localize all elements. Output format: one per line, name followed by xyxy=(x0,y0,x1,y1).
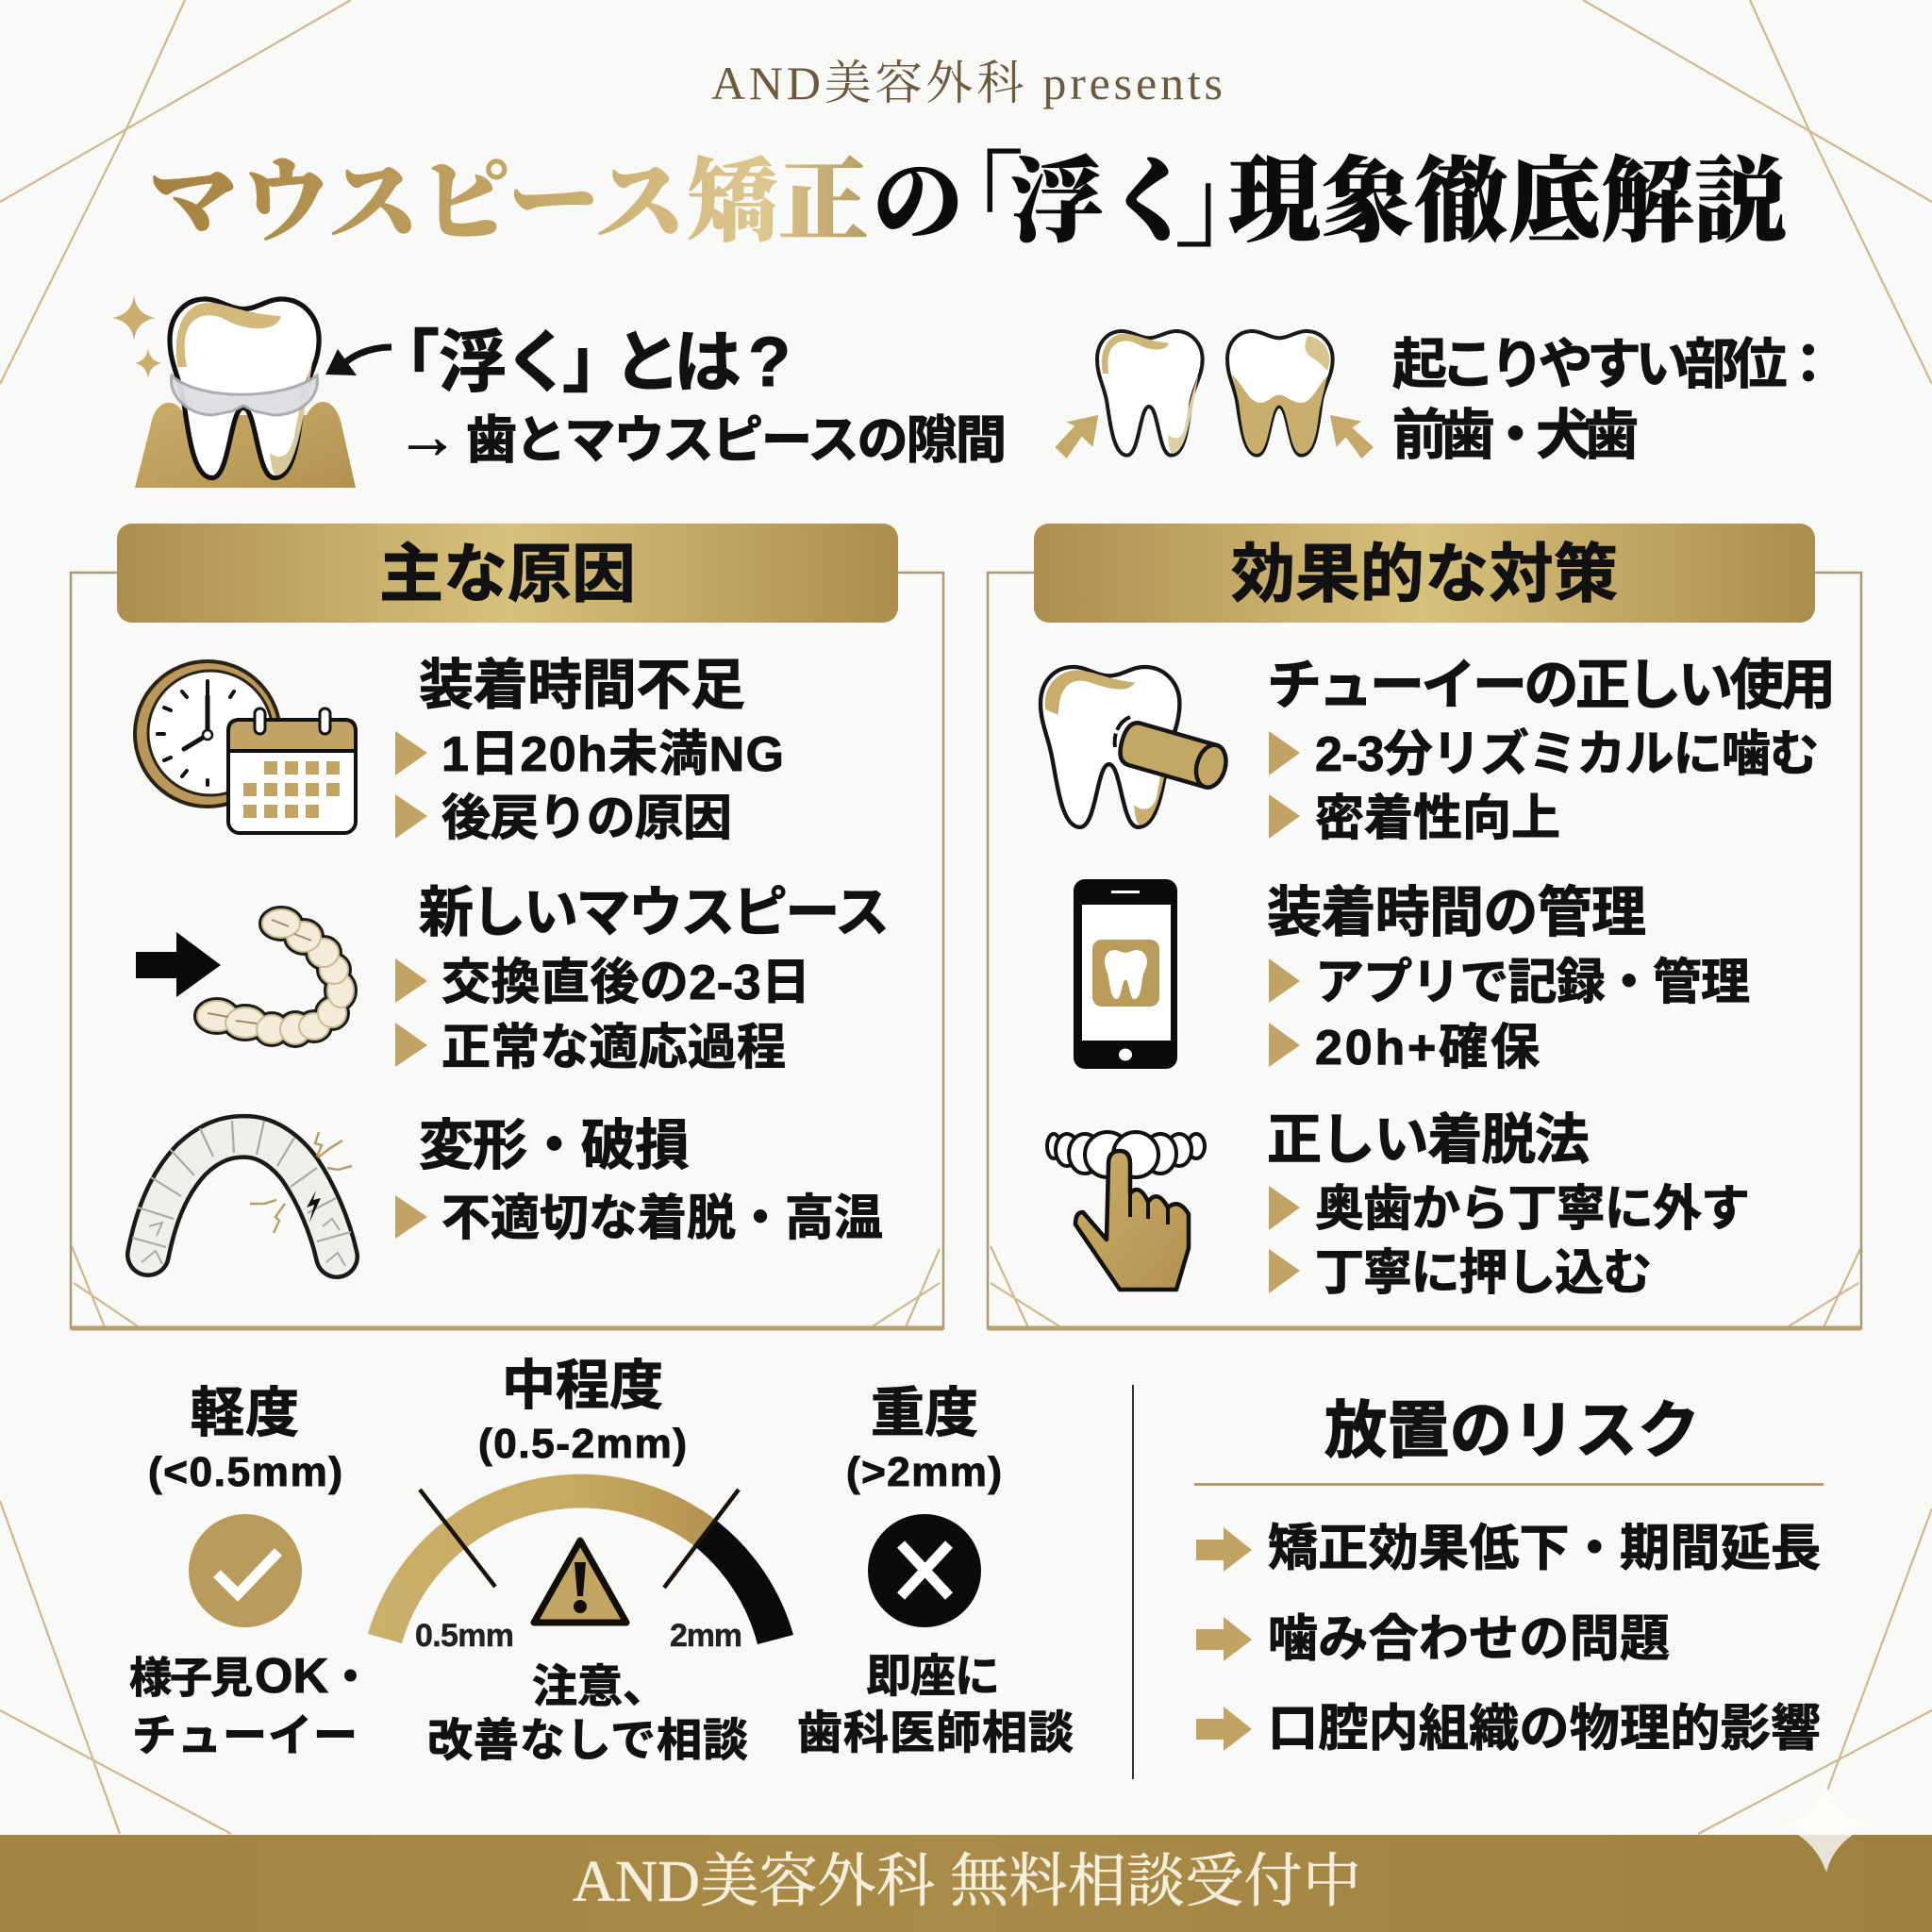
cause 2 text: 正常な適応過程 xyxy=(441,1021,786,1075)
icon: front tooth and canine with arrows xyxy=(1055,331,1374,458)
countermeasure 3 text: 丁寧に押し込む xyxy=(1315,1246,1652,1301)
cause 2 text: 交換直後の2-3日 xyxy=(441,956,810,1010)
risk 3: 口腔内組織の物理的影響 xyxy=(1268,1701,1821,1757)
text: common sites: 前歯・犬歯 xyxy=(1392,405,1639,466)
severity: severe: (>2mm) xyxy=(846,1449,1002,1495)
cause 3 text xyxy=(395,1115,883,1246)
severity: mild xyxy=(129,1383,373,1760)
icon: tooth with chewie xyxy=(1041,667,1231,827)
panel: countermeasures xyxy=(988,524,1861,1328)
countermeasure 2 text xyxy=(1267,882,1750,1075)
section: risks xyxy=(1194,1395,1824,1757)
title: の xyxy=(873,130,963,259)
panel heading: causes: 主な原因 xyxy=(379,539,636,610)
severity: moderate: (0.5-2mm) xyxy=(478,1421,687,1467)
title: く xyxy=(1106,130,1196,259)
severity: mild: OK xyxy=(255,1649,328,1704)
severity: severe: 重度 xyxy=(871,1383,978,1443)
cause 3 text: 変形・破損 xyxy=(419,1115,690,1176)
footer banner: AND美容外科 無料相談受付中 xyxy=(573,1850,1361,1914)
severity: moderate: 注意、 xyxy=(532,1662,668,1712)
gauge: 2mm xyxy=(670,1618,742,1654)
text: definition: 歯とマウスピースの隙間 xyxy=(466,412,1007,469)
countermeasure 1 text: 2-3分リズミカルに噛む xyxy=(1315,727,1819,782)
cause 2 text: 新しいマウスピース xyxy=(419,882,890,943)
severity: mild: チューイー xyxy=(132,1710,358,1760)
risk 2: 噛み合わせの問題 xyxy=(1268,1611,1670,1667)
text: what is floating: 」 xyxy=(562,325,630,401)
panel heading: countermeasures xyxy=(1034,524,1815,623)
section: risks: 放置のリスク xyxy=(1324,1395,1700,1465)
countermeasure 3 text xyxy=(1267,1109,1750,1301)
title: 浮 xyxy=(1010,127,1103,260)
severity: moderate: 中程度 xyxy=(502,1356,663,1416)
severity: mild: 軽度 xyxy=(191,1383,299,1443)
icon: cross xyxy=(868,1514,981,1627)
text: what is floating: 浮 xyxy=(439,325,507,401)
title xyxy=(148,120,1787,265)
severity: moderate: 改善なしで相談 xyxy=(427,1716,748,1766)
arrow: pointing to gap xyxy=(325,347,391,375)
icon: warning xyxy=(534,1541,626,1623)
gauge: 0.5mm xyxy=(415,1618,514,1654)
text: definition: → xyxy=(396,401,458,471)
icon: finger pressing teeth xyxy=(1047,1132,1205,1290)
severity: mild: ・ xyxy=(328,1652,373,1702)
text: common sites xyxy=(1392,334,1836,466)
text: what is floating: 「 xyxy=(372,325,440,401)
text: what is floating: と xyxy=(613,325,681,401)
icon: new aligner xyxy=(197,909,354,1044)
text: what is floating: は xyxy=(674,325,741,401)
icon: black arrow xyxy=(136,932,221,997)
header: presenter line: AND美容外科 presents xyxy=(711,57,1223,109)
icon: clock and calendar xyxy=(135,661,356,833)
text: what is floating xyxy=(372,323,791,401)
footer banner xyxy=(0,1835,1932,1932)
cause 1 text: 装着時間不足 xyxy=(419,655,745,716)
icon: smartphone app xyxy=(1074,879,1177,1069)
title: 現象徹底解説 xyxy=(1228,127,1787,260)
risk 1: 矯正効果低下・期間延長 xyxy=(1268,1521,1821,1576)
countermeasure 1 text xyxy=(1267,655,1836,846)
icon: check xyxy=(189,1514,302,1627)
text: common sites: 起こりやすい部位： xyxy=(1392,334,1836,395)
severity: severe: 歯科医師相談 xyxy=(797,1708,1074,1758)
icon: tooth with gap to aligner xyxy=(112,295,356,488)
title: 」 xyxy=(1175,124,1274,265)
icon: damaged aligner xyxy=(132,1121,352,1266)
countermeasure 1 text: チューイーの正しい使用 xyxy=(1267,655,1836,716)
cause 3 text: 不適切な着脱・高温 xyxy=(441,1191,883,1246)
gauge xyxy=(368,1474,793,1654)
severity: mild: 様子見 xyxy=(129,1654,253,1702)
text: what is floating: く xyxy=(504,325,572,401)
cause 1 text: 1日20h未満NG xyxy=(441,727,784,782)
icon: corner sparkle xyxy=(1780,1780,1873,1873)
panel: causes xyxy=(71,524,943,1328)
title: 「 xyxy=(924,120,1023,261)
cause 1 text: 後戻りの原因 xyxy=(441,791,732,846)
countermeasure 3 text: 奥歯から丁寧に外す xyxy=(1315,1182,1750,1237)
cause 1 text xyxy=(395,655,784,846)
severity: severe: 即座に xyxy=(866,1652,1000,1702)
countermeasure 2 text: アプリで記録・管理 xyxy=(1315,956,1750,1010)
panel heading: causes xyxy=(117,524,898,623)
severity: severe xyxy=(797,1383,1074,1758)
countermeasure 2 text: 装着時間の管理 xyxy=(1267,882,1646,943)
severity: moderate xyxy=(368,1356,793,1766)
panel heading: countermeasures: 効果的な対策 xyxy=(1231,539,1618,610)
severity: mild: (<0.5mm) xyxy=(148,1449,342,1495)
countermeasure 3 text: 正しい着脱法 xyxy=(1267,1109,1590,1171)
countermeasure 2 text: 20h+確保 xyxy=(1315,1021,1540,1075)
cause 2 text xyxy=(395,882,890,1075)
countermeasure 1 text: 密着性向上 xyxy=(1315,791,1560,846)
title: マウスピース矯正 xyxy=(148,130,869,259)
text: what is floating: ? xyxy=(748,323,791,401)
